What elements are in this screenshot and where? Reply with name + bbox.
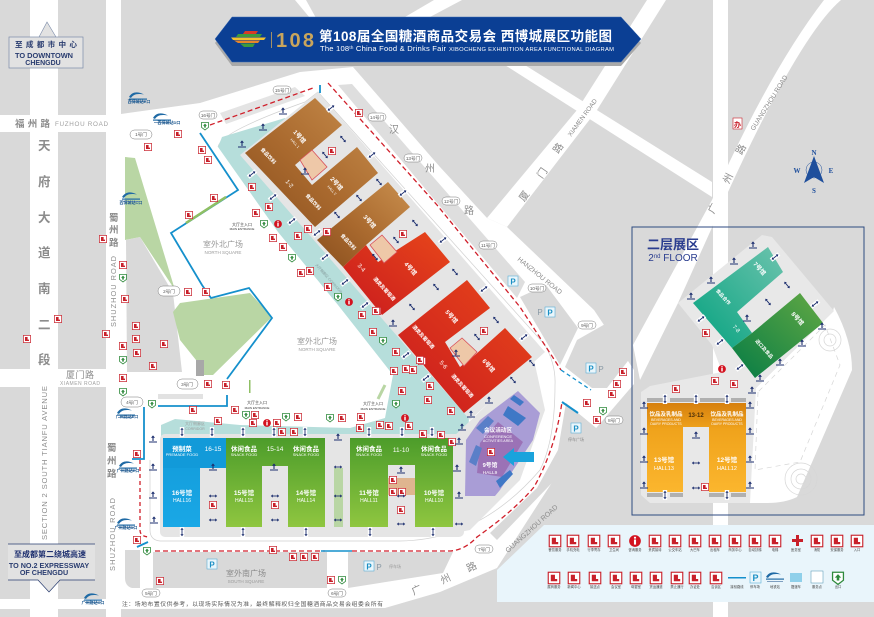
panel: halls 3-4: 3-4 bbox=[356, 263, 366, 274]
panel: halls 5-6: 酒类及葡萄酒 bbox=[449, 373, 475, 399]
square and corridor labels: MAIN ENTRANCE bbox=[245, 406, 269, 410]
panel: legend: 自动扶梯 bbox=[748, 547, 762, 552]
parking markers: P bbox=[376, 563, 382, 572]
panel: halls 1-2: HALL 2 bbox=[326, 185, 337, 196]
panel: south halls 16-10: 16号馆 bbox=[172, 488, 193, 497]
panel: hall 9 conference area: CONFERENCE bbox=[484, 434, 512, 439]
panel: south halls 16-10: HALL14 bbox=[297, 498, 315, 504]
panel: legend: 办证处 bbox=[690, 584, 701, 589]
panel: legend: 行李寄存 bbox=[587, 547, 601, 552]
road labels: FUZHOU ROAD bbox=[55, 121, 108, 128]
facility icons bbox=[23, 109, 742, 585]
road labels: 段 bbox=[38, 352, 51, 367]
panel: south halls 16-10: SNACK FOOD bbox=[421, 452, 447, 457]
gate labels: 8号门 bbox=[608, 417, 620, 424]
road labels: XIAMEN ROAD bbox=[567, 98, 599, 138]
panel: legend: 展商服务 bbox=[547, 584, 561, 589]
panel: legend: 禁止通行 bbox=[670, 584, 684, 589]
road labels: 路 bbox=[107, 468, 117, 480]
panel: south halls 16-10: 11号馆 bbox=[359, 488, 379, 497]
road labels: 道 bbox=[38, 245, 51, 260]
metro station markers: 西博城站E口 bbox=[128, 98, 150, 104]
panel: legend: 新闻中心 bbox=[567, 584, 581, 589]
gate labels: 4号门 bbox=[126, 399, 138, 406]
title banner: th bbox=[349, 45, 354, 50]
panel: legend: 接送点 bbox=[590, 584, 601, 589]
panel: south halls 16-10: 15-14 bbox=[267, 446, 284, 453]
panel: 2nd floor inset: DAIRY PRODUCTS bbox=[650, 422, 682, 426]
parking markers: P bbox=[573, 424, 579, 434]
road labels: 门 bbox=[534, 165, 550, 181]
callout: to No.2 expressway: TO NO.2 EXPRESSWAY bbox=[9, 561, 89, 570]
panel: legend: 洽谈区 bbox=[711, 584, 722, 589]
panel: legend: 大巴车 bbox=[690, 547, 701, 552]
panel: 2nd floor inset: 8号馆 bbox=[789, 310, 806, 327]
gate labels: 12号门 bbox=[444, 198, 459, 205]
panel: south halls 16-10: 10号馆 bbox=[424, 488, 445, 497]
road labels: GUANGZHOU ROAD bbox=[505, 504, 560, 554]
square and corridor labels: 室外北广场 bbox=[297, 336, 337, 346]
panel: 2nd floor inset: HALL13 bbox=[654, 466, 674, 472]
footnote: 注：场地布置仅供参考，以现场实际情况为准，最终解释权归全国糖酒商品交易会组委会所有 bbox=[122, 600, 383, 608]
title banner: China Food & Drinks Fair bbox=[354, 44, 446, 53]
panel: legend: 摆渡车 bbox=[791, 584, 802, 589]
hall 7 bbox=[693, 247, 783, 348]
title banner bbox=[215, 17, 641, 66]
panel: legend: 卫生间 bbox=[609, 547, 619, 552]
callout: to No.2 expressway bbox=[8, 544, 95, 592]
square and corridor labels: 室外南广场 bbox=[226, 568, 266, 578]
panel: legend bbox=[497, 516, 874, 602]
panel: halls 5-6 bbox=[398, 280, 532, 413]
gate labels: 13号门 bbox=[406, 155, 421, 162]
metro station markers: 广州路站F口 bbox=[116, 413, 138, 419]
parking markers: P bbox=[598, 365, 604, 374]
square and corridor labels: 大厅主入口 bbox=[247, 399, 267, 405]
title banner: 第108届全国糖酒商品交易会 西博城展区功能图 bbox=[319, 28, 612, 44]
parking markers bbox=[207, 276, 604, 572]
callout: to downtown Chengdu: CHENGDU bbox=[25, 60, 61, 67]
callout: to No.2 expressway: OF CHENGDU bbox=[20, 568, 68, 577]
title banner: The 108 bbox=[320, 44, 349, 53]
square and corridor labels: 大厅侧廊区 bbox=[185, 420, 205, 426]
parking markers: P bbox=[537, 308, 543, 317]
panel: legend: 电梯 bbox=[772, 547, 779, 552]
panel: halls 5-6: 酒类及葡萄酒 bbox=[410, 324, 436, 350]
road labels: 厦门路 bbox=[66, 369, 94, 380]
panel: south halls 16-10 bbox=[163, 438, 453, 527]
panel: 2nd floor inset: FLOOR bbox=[661, 253, 698, 264]
metro station markers: 广州路站E口 bbox=[117, 467, 139, 473]
road labels: 二 bbox=[38, 318, 51, 332]
panel: 2nd floor inset: 12号馆 bbox=[717, 455, 738, 464]
gate labels: 6号门 bbox=[331, 590, 343, 597]
panel: hall 9 conference area: 会议活动区 bbox=[484, 426, 512, 434]
panel: legend: P bbox=[752, 573, 759, 583]
panel: south halls 16-10: 14号馆 bbox=[296, 488, 317, 497]
panel: legend: 餐饮服务 bbox=[548, 547, 562, 552]
panel: legend: 服务点 bbox=[812, 584, 823, 589]
panel: halls 5-6: 6号馆 bbox=[480, 357, 497, 374]
road labels: 广 bbox=[410, 583, 424, 598]
facility icons: 办 bbox=[734, 120, 741, 129]
metro station markers: 广州路站D口 bbox=[115, 524, 137, 530]
gate labels: 9号门 bbox=[581, 322, 593, 329]
metro station markers: 西博城站D口 bbox=[158, 119, 180, 125]
road labels: 大 bbox=[38, 210, 51, 225]
door and circulation arrows bbox=[149, 103, 826, 537]
road labels: 厦 bbox=[517, 189, 532, 204]
square and corridor labels: MAIN ENTRANCE bbox=[361, 407, 385, 411]
road labels: 蜀 bbox=[109, 213, 119, 224]
panel: halls 1-2: 2号馆 bbox=[328, 175, 345, 192]
gate labels: 14号门 bbox=[370, 114, 385, 121]
panel: 2nd floor inset: 13号馆 bbox=[654, 455, 675, 464]
panel: south halls 16-10: 11-10 bbox=[393, 447, 409, 454]
panel: halls 3-4: 食品饮料 bbox=[339, 232, 357, 252]
panel: legend: 公交车站 bbox=[668, 547, 682, 552]
icon: fair logo bbox=[231, 31, 266, 47]
panel: south halls 16-10: PREMADE FOOD bbox=[166, 452, 198, 457]
panel: halls 5-6: 5-6 bbox=[438, 360, 448, 371]
title banner: XIBOCHENG EXHIBITION AREA FUNCTIONAL DIAGRAM bbox=[449, 47, 614, 53]
panel: legend: 手机充电 bbox=[566, 547, 580, 552]
shuttle routes and dashed boundary bbox=[132, 83, 591, 551]
panel: halls 1-2: 食品饮料 bbox=[259, 146, 277, 166]
metro station markers: 西博城站C口 bbox=[120, 199, 142, 205]
panel: south halls 16-10: 休闲食品 bbox=[421, 444, 448, 453]
road labels: 州 bbox=[107, 456, 117, 467]
road labels: 天 bbox=[38, 139, 51, 153]
panel: legend: 消防 bbox=[814, 547, 821, 552]
parking markers: P bbox=[547, 308, 553, 318]
panel: 2nd floor inset: 二层展区 bbox=[647, 237, 699, 252]
road labels: 路 bbox=[733, 142, 749, 157]
road labels: SHUZHOU ROAD bbox=[108, 498, 117, 571]
parking markers: P bbox=[510, 278, 516, 286]
panel: 2nd floor inset: 食品合作 bbox=[714, 288, 732, 307]
panel: south halls 16-10: SNACK FOOD bbox=[231, 452, 257, 457]
panel: hall 9 conference area bbox=[465, 391, 540, 496]
square and corridor labels: 室外北广场 bbox=[203, 239, 243, 249]
panel: legend: 贵宾接待 bbox=[648, 547, 662, 552]
road labels: 路 bbox=[109, 237, 119, 249]
road labels: SECTION 2 SOUTH TIANFU AVENUE bbox=[40, 386, 49, 540]
road labels: 南 bbox=[38, 282, 51, 296]
hall 8 bbox=[732, 293, 823, 378]
road labels: 路 bbox=[464, 204, 474, 217]
panel: south halls 16-10: HALL10 bbox=[425, 498, 443, 504]
panel: halls 1-2: 食品饮料 bbox=[304, 192, 322, 212]
site ground blocks bbox=[125, 84, 631, 588]
square and corridor labels: 大厅主入口 bbox=[232, 221, 252, 227]
panel: hall 9 conference area: HALL9 bbox=[483, 470, 498, 476]
panel: south halls 16-10: 16-15 bbox=[205, 446, 222, 453]
gate labels: 3号门 bbox=[181, 381, 193, 388]
square and corridor labels: NORTH SQUARE bbox=[299, 347, 335, 352]
panel: 2nd floor inset: 进口及食品 bbox=[753, 338, 775, 360]
compass: S bbox=[812, 187, 816, 195]
square and corridor labels: 大厅侧廊区 CORRIDOR bbox=[314, 262, 344, 295]
panel: legend: 地铁站 bbox=[770, 584, 781, 589]
compass: N bbox=[811, 149, 817, 157]
panel: legend: 停车场 bbox=[750, 584, 761, 589]
gate labels: 5号门 bbox=[145, 590, 157, 597]
panel: 2nd floor inset: 13-12 bbox=[688, 413, 704, 419]
gate labels: 2号门 bbox=[163, 288, 175, 295]
square and corridor labels: SOUTH SQUARE bbox=[228, 579, 264, 584]
panel: south halls 16-10: SNACK FOOD bbox=[356, 452, 382, 457]
panel: south halls 16-10: HALL11 bbox=[360, 498, 378, 504]
panel: south halls 16-10: 休闲食品 bbox=[356, 444, 382, 453]
parking markers: P bbox=[209, 560, 215, 570]
panel: south halls 16-10: HALL15 bbox=[235, 498, 253, 504]
green spaces bbox=[125, 157, 385, 399]
panel: halls 3-4: 酒类及葡萄酒 bbox=[371, 276, 397, 302]
road labels: 州 bbox=[109, 225, 119, 236]
panel: south halls 16-10: 休闲食品 bbox=[231, 444, 258, 453]
square and corridor labels bbox=[185, 221, 385, 584]
panel: south halls 16-10: 休闲食品 bbox=[293, 444, 320, 453]
metro station markers: 广州路站C口 bbox=[82, 599, 104, 605]
square and corridor labels: MAIN ENTRANCE bbox=[230, 227, 254, 231]
panel: legend: 接驳路线 bbox=[730, 584, 744, 589]
road labels: 汉 bbox=[389, 124, 399, 136]
road labels: 广 bbox=[706, 201, 721, 216]
road labels: HANZHOU ROAD bbox=[516, 256, 563, 296]
panel: 2nd floor inset: 饮品及乳制品 bbox=[649, 410, 683, 418]
gate labels bbox=[121, 86, 623, 597]
parking markers: P bbox=[588, 364, 594, 374]
road labels: XIAMEN ROAD bbox=[60, 381, 100, 387]
gate labels: 15号门 bbox=[275, 87, 290, 94]
panel: south halls 16-10: SNACK FOOD bbox=[293, 452, 319, 457]
gate labels: 1号门 bbox=[135, 131, 147, 138]
gate labels: 10号门 bbox=[530, 285, 545, 292]
road labels: SHUZHOU ROAD bbox=[109, 256, 118, 327]
arrow: hall 9 entrance bbox=[503, 448, 534, 466]
panel: hall 9 conference area: 9号馆 bbox=[483, 461, 498, 469]
square and corridor labels: NORTH SQUARE bbox=[205, 250, 241, 255]
panel: 2nd floor inset: BEVERAGES AND bbox=[651, 418, 681, 422]
panel: legend: 商务中心 bbox=[728, 547, 742, 552]
road labels: 蜀 bbox=[107, 443, 117, 454]
panel: hall 9 conference area: ACTIVITIES AREA bbox=[483, 439, 514, 443]
panel: halls 1-2: 1号馆 bbox=[291, 128, 308, 145]
panel: south halls 16-10: HALL16 bbox=[173, 498, 191, 504]
parking markers: 停车场 bbox=[389, 563, 401, 569]
road labels bbox=[15, 74, 790, 598]
panel: halls 3-4: 3号馆 bbox=[361, 213, 378, 230]
corridor: teal hall corridor bbox=[161, 118, 470, 477]
title banner: 108 bbox=[276, 30, 314, 52]
panel: 2nd floor inset: nd bbox=[654, 254, 661, 260]
panel: legend: 货运通道 bbox=[649, 584, 663, 589]
panel: legend: 会议室 bbox=[611, 584, 622, 589]
panel: halls 1-2: 1-2 bbox=[284, 179, 294, 190]
panel: 2nd floor inset: 7号馆 bbox=[751, 260, 768, 277]
square and corridor labels: CORRIDOR bbox=[185, 427, 205, 431]
road labels: 路 bbox=[464, 559, 479, 575]
panel: 2nd floor inset bbox=[632, 227, 864, 515]
road labels: 府 bbox=[38, 174, 51, 189]
panel: halls 5-6: 5号馆 bbox=[443, 308, 460, 325]
hall plinths bbox=[160, 92, 545, 537]
road labels: 福州路 bbox=[15, 118, 50, 130]
parking markers: P bbox=[366, 562, 372, 572]
panel: legend: 医务室 bbox=[791, 547, 802, 552]
panel: legend: 出口 bbox=[835, 584, 841, 589]
panel: 2nd floor inset: DAIRY PRODUCTS bbox=[711, 422, 743, 426]
callout: to downtown Chengdu: TO DOWNTOWN bbox=[15, 51, 73, 60]
road labels: 州 bbox=[425, 163, 435, 175]
callout: to downtown Chengdu bbox=[9, 22, 83, 68]
callout: to downtown Chengdu: 至成都市中心 bbox=[15, 39, 77, 49]
panel: 2nd floor inset: HALL12 bbox=[717, 466, 737, 472]
callout: to No.2 expressway: 至成都第二绕城高速 bbox=[14, 549, 86, 559]
panel: legend: 安保服务 bbox=[830, 547, 844, 552]
panel: legend: 入口 bbox=[854, 548, 860, 552]
panel: legend: 出租车 bbox=[710, 547, 721, 552]
compass: E bbox=[829, 167, 834, 175]
road labels: 州 bbox=[439, 572, 453, 587]
panel: legend: 咨询服务 bbox=[628, 547, 642, 552]
panel: halls 1-2 bbox=[245, 98, 378, 227]
road labels: 路 bbox=[550, 140, 566, 156]
gate labels: 16号门 bbox=[201, 112, 216, 119]
panel: 2nd floor inset: BEVERAGES AND bbox=[712, 418, 742, 422]
panel: 2nd floor inset: 饮品及乳制品 bbox=[710, 410, 744, 418]
compass: W bbox=[794, 167, 800, 175]
panel: 2nd floor inset: 2 bbox=[648, 253, 654, 264]
gate labels: 7号门 bbox=[478, 546, 490, 553]
compass bbox=[794, 149, 834, 195]
square and corridor labels: 大厅主入口 bbox=[363, 400, 383, 406]
panel: south halls 16-10: 15号馆 bbox=[234, 488, 255, 497]
panel: halls 1-2: HALL 1 bbox=[289, 138, 300, 149]
panel: 2nd floor inset: 7-8 bbox=[731, 324, 741, 334]
road labels: 州 bbox=[721, 171, 736, 186]
panel: legend: 母婴室 bbox=[631, 584, 642, 589]
hall 13 / 12 bbox=[647, 403, 746, 492]
panel: halls 3-4: 4号馆 bbox=[402, 260, 419, 277]
panel: halls 3-4 bbox=[317, 182, 450, 315]
gate labels: 11号门 bbox=[481, 242, 495, 249]
road labels: GUANGZHOU ROAD bbox=[750, 74, 790, 132]
panel: south halls 16-10: 预制菜 bbox=[172, 444, 192, 453]
parking markers: 停车广场 bbox=[568, 436, 584, 442]
metro station markers bbox=[82, 92, 180, 605]
